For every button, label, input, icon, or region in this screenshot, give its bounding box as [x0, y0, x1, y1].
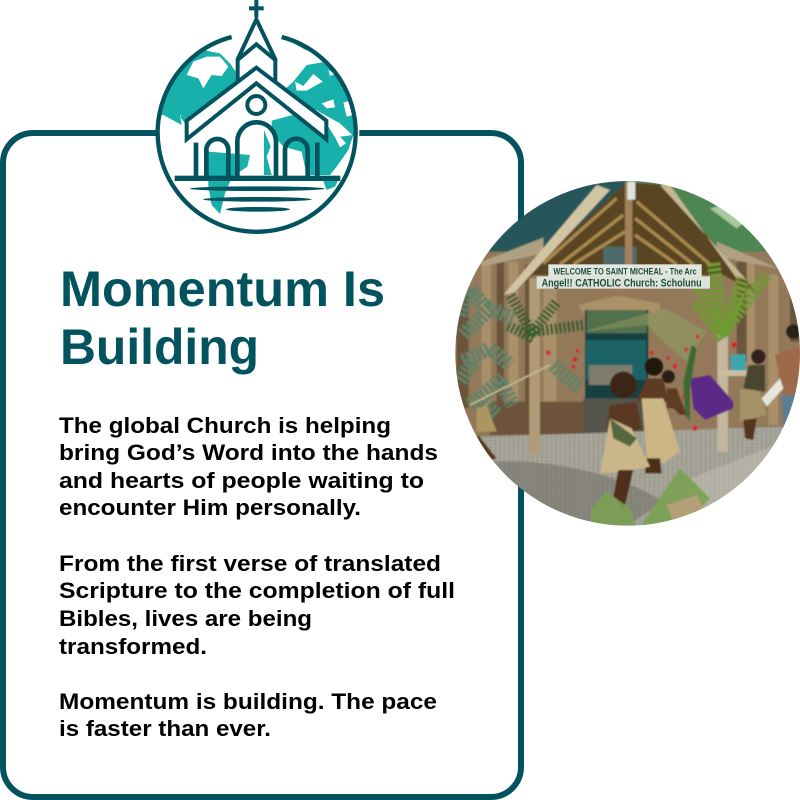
branches left — [460, 288, 580, 415]
bench — [490, 402, 583, 435]
globe continents — [162, 43, 354, 214]
sky and trees — [488, 181, 628, 253]
man far right — [786, 324, 800, 339]
cross — [249, 0, 264, 17]
text block: paragraph 2: From the first verse of translated — [59, 551, 441, 576]
title: Momentum Is — [60, 261, 385, 317]
adult dancer — [637, 378, 668, 402]
welcome sign: WELCOME TO SAINT MICHEAL - The Arc — [553, 267, 697, 277]
side roofs — [480, 238, 543, 267]
doorway — [578, 296, 660, 313]
person right walking — [751, 349, 766, 364]
ground and water lines — [175, 176, 340, 212]
posts — [529, 278, 540, 455]
text block: paragraph 1: The global Church is helping — [59, 413, 391, 438]
gable roof — [497, 182, 760, 300]
text block: paragraph 2: transformed. — [59, 634, 207, 659]
text block: paragraph 1: bring God’s Word into the hands — [59, 440, 438, 465]
gravel ground — [479, 426, 784, 526]
text block: paragraph 1: encounter Him personally. — [59, 495, 361, 520]
text block: paragraph 3 — [59, 689, 437, 741]
bushes — [590, 468, 710, 528]
text block: paragraph 2: Scripture to the completion of full — [59, 578, 455, 603]
text block: paragraph 2: Bibles, lives are being — [59, 606, 312, 631]
icon: church and globe logo — [153, 0, 367, 234]
title: Building — [60, 319, 259, 375]
steeple — [238, 19, 275, 83]
wall — [450, 252, 800, 438]
title — [60, 261, 385, 375]
arches — [196, 122, 317, 176]
text block: paragraph 1: and hearts of people waiting to — [59, 468, 424, 493]
round window — [247, 96, 265, 114]
welcome sign — [537, 264, 710, 289]
text block: paragraph 3: Momentum is building. The pace — [59, 689, 437, 714]
altar — [690, 375, 733, 420]
welcome sign: Angel!! CATHOLIC Church: Scholunu — [542, 277, 702, 289]
roof — [187, 68, 326, 139]
text block: paragraph 3: is faster than ever. — [59, 716, 271, 741]
palm right — [690, 262, 767, 338]
child behind — [667, 388, 687, 415]
flowers — [546, 335, 737, 431]
child foreground — [610, 372, 637, 398]
panel: text card — [3, 133, 521, 797]
fronds over door — [583, 308, 707, 362]
text block: paragraph 2 — [59, 551, 455, 659]
photo: church entrance with children — [450, 175, 800, 528]
palm left — [507, 295, 583, 338]
globe ring — [158, 37, 356, 232]
text block: paragraph 1 — [59, 413, 438, 520]
